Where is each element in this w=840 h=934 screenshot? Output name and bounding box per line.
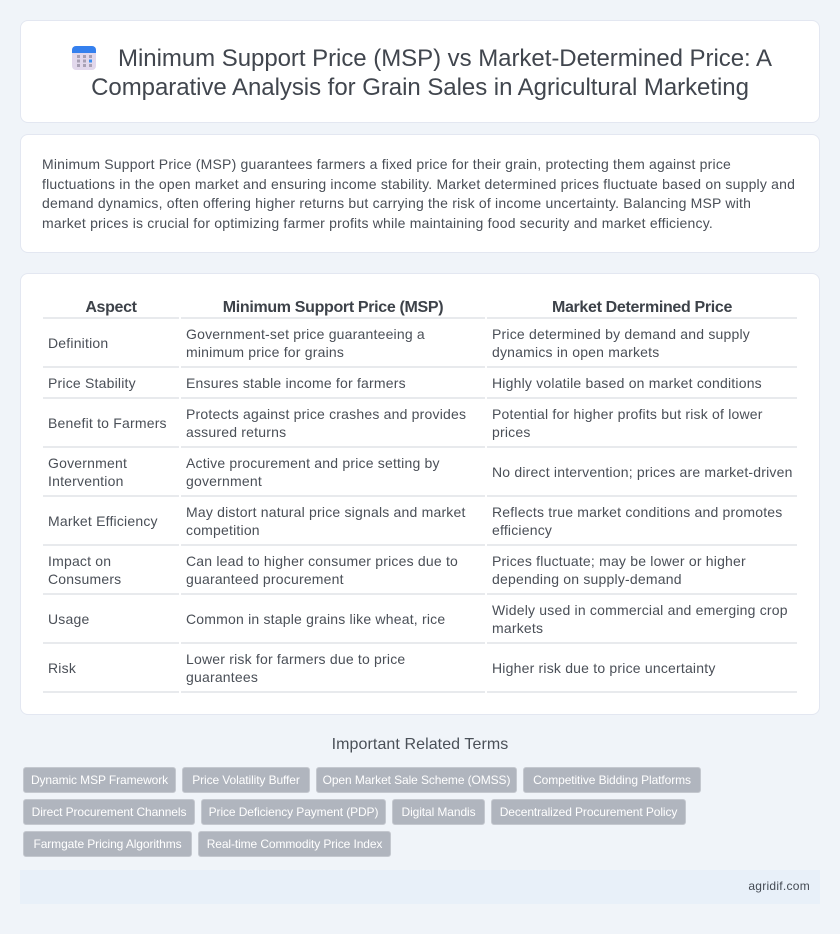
related term tags [23, 767, 701, 857]
intro text [42, 156, 795, 231]
row: benefit to farmers: Potential for higher profits but risk of lower [492, 406, 763, 422]
related term tags: Price Volatility Buffer [192, 773, 300, 787]
row: government intervention: Government [48, 455, 127, 471]
table panel [20, 273, 820, 715]
footer site name: agridif.com [748, 879, 810, 893]
row: government intervention: Intervention [48, 473, 124, 489]
row: price stability: Highly volatile based on market conditions [492, 375, 762, 391]
related term tags: Decentralized Procurement Policy [500, 805, 677, 819]
row: risk: guarantees [186, 669, 258, 685]
row: market efficiency: May distort natural price signals and market [186, 504, 466, 520]
row: usage [48, 602, 788, 636]
row: market efficiency: Market Efficiency [48, 513, 158, 529]
row: impact on consumers [48, 553, 746, 587]
row: market efficiency: Reflects true market conditions and promotes [492, 504, 782, 520]
intro text: market prices is crucial for optimizing farmer profits while maintaining food security and market efficiency. [42, 215, 713, 231]
row: benefit to farmers: assured returns [186, 424, 286, 440]
row: government intervention: No direct intervention; prices are market-driven [492, 464, 793, 480]
row: usage: Usage [48, 611, 89, 627]
row: risk: Lower risk for farmers due to price [186, 651, 405, 667]
row: impact on consumers: depending on supply-demand [492, 571, 682, 587]
row: definition: Price determined by demand and supply [492, 326, 750, 342]
footer bar [20, 870, 820, 904]
table header: Minimum Support Price (MSP) [223, 299, 443, 316]
related terms heading: Important Related Terms [332, 736, 508, 753]
row: definition: dynamics in open markets [492, 344, 659, 360]
related term tags: Dynamic MSP Framework [31, 773, 168, 787]
icon: calendar [72, 46, 96, 70]
row: impact on consumers: Consumers [48, 571, 121, 587]
row: risk: Risk [48, 660, 76, 676]
row: government intervention: Active procurement and price setting by [186, 455, 440, 471]
row: definition [48, 326, 750, 360]
row: usage: markets [492, 620, 543, 636]
title text: Minimum Support Price (MSP) vs Market-Determined Price: A [118, 45, 772, 72]
related term tags: Direct Procurement Channels [32, 805, 186, 819]
row: benefit to farmers: Protects against price crashes and provides [186, 406, 466, 422]
row: market efficiency [48, 504, 782, 538]
row: usage: Widely used in commercial and emerging crop [492, 602, 788, 618]
table header [85, 299, 732, 316]
row: impact on consumers: Impact on [48, 553, 111, 569]
row: impact on consumers: guaranteed procurement [186, 571, 344, 587]
row: risk: Higher risk due to price uncertainty [492, 660, 716, 676]
row: risk [48, 651, 716, 685]
related term tags: Real-time Commodity Price Index [207, 837, 382, 851]
related term tags: Price Deficiency Payment (PDP) [209, 805, 378, 819]
row: government intervention [48, 455, 793, 489]
related term tags: Farmgate Pricing Algorithms [33, 837, 182, 851]
row: government intervention: government [186, 473, 262, 489]
row: benefit to farmers [48, 406, 763, 440]
row: impact on consumers: Prices fluctuate; may be lower or higher [492, 553, 746, 569]
row: benefit to farmers: prices [492, 424, 531, 440]
row: price stability: Price Stability [48, 375, 136, 391]
intro panel [20, 134, 820, 253]
title card [20, 20, 820, 123]
row: market efficiency: competition [186, 522, 260, 538]
row: benefit to farmers: Benefit to Farmers [48, 415, 167, 431]
row: market efficiency: efficiency [492, 522, 552, 538]
related term tags: Competitive Bidding Platforms [533, 773, 691, 787]
row: price stability: Ensures stable income for farmers [186, 375, 406, 391]
table header: Aspect [85, 299, 137, 316]
row: definition: minimum price for grains [186, 344, 344, 360]
row: impact on consumers: Can lead to higher consumer prices due to [186, 553, 458, 569]
title text: Comparative Analysis for Grain Sales in Agricultural Marketing [91, 74, 749, 101]
row: definition: Government-set price guaranteeing a [186, 326, 425, 342]
intro text: Minimum Support Price (MSP) guarantees farmers a fixed price for their grain, protecting them against price [42, 156, 731, 172]
related term tags: Digital Mandis [402, 805, 475, 819]
related term tags: Open Market Sale Scheme (OMSS) [323, 773, 510, 787]
row: usage: Common in staple grains like wheat, rice [186, 611, 445, 627]
intro text: demand dynamics, often offering higher returns but carrying the risk of income uncertainty. Balancing MSP with [42, 195, 751, 211]
title text [91, 45, 772, 101]
row: definition: Definition [48, 335, 108, 351]
row: price stability [48, 375, 762, 391]
intro text: fluctuations in the open market and ensuring income stability. Market determined prices fluctuate based on supply and [42, 176, 795, 192]
table header: Market Determined Price [552, 299, 732, 316]
comparison table [43, 299, 797, 693]
